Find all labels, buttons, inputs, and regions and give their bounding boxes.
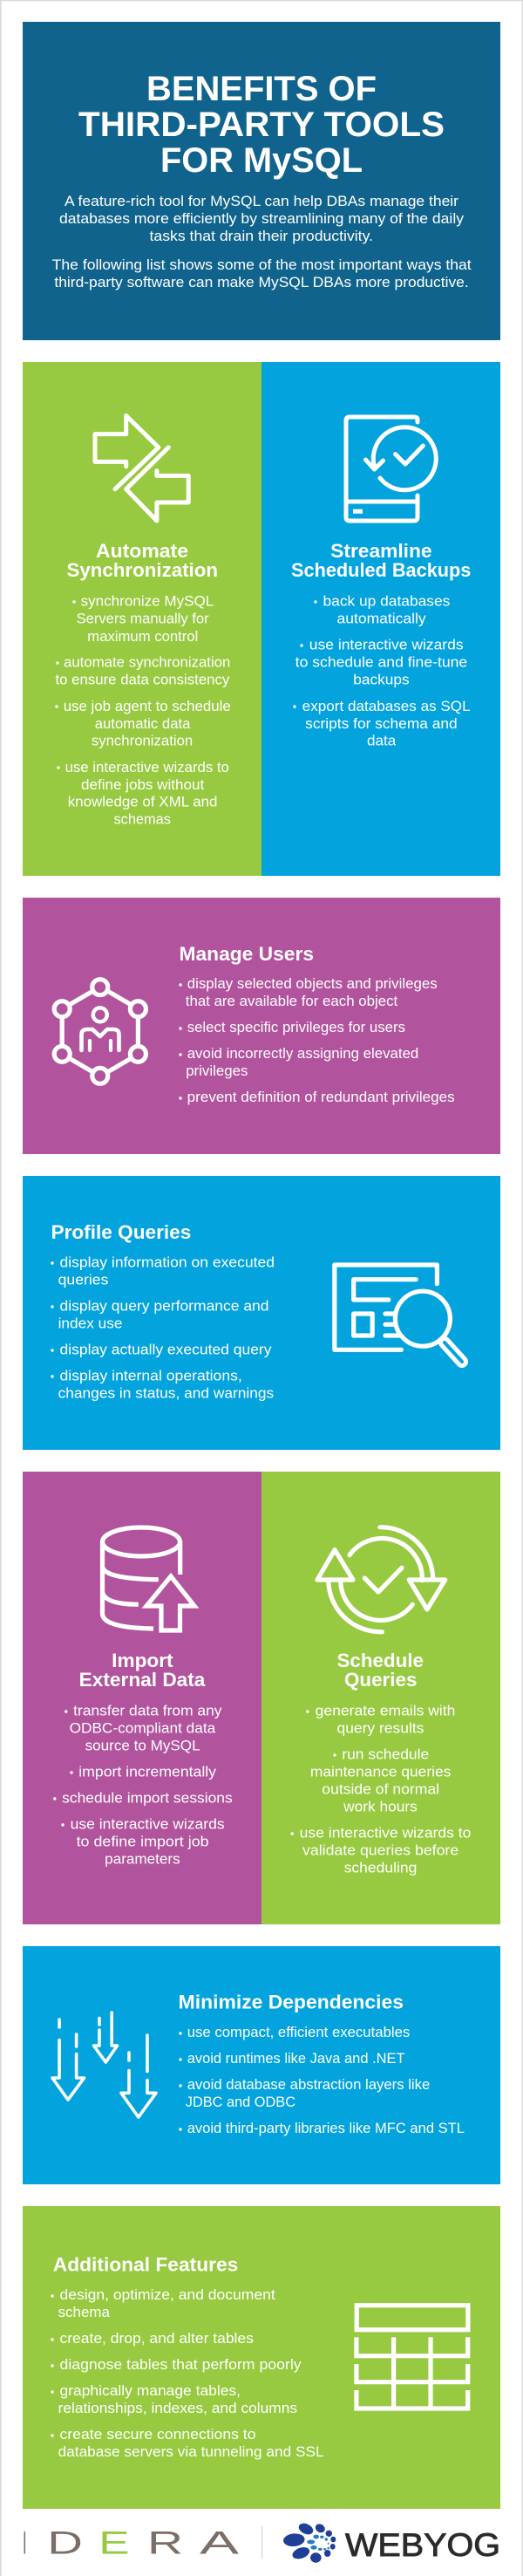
bullet list: use interactive wizards <box>71 1815 225 1832</box>
bullet list: create secure connections to <box>59 2426 256 2443</box>
icon: database with upload arrow <box>103 1527 194 1630</box>
heading: Automate <box>96 540 188 562</box>
bullet list <box>51 1254 275 1401</box>
panel: header intro <box>23 22 500 340</box>
intro text: tasks that drain their productivity. <box>150 228 373 244</box>
bullet list: maintenance queries <box>310 1763 451 1780</box>
icon: three down arrows <box>52 2012 156 2117</box>
title: BENEFITS OF <box>146 70 377 108</box>
intro text: The following list shows some of the most important ways that <box>52 256 472 273</box>
bullet list <box>291 1702 471 1876</box>
bullet list: maximum control <box>87 628 198 645</box>
heading: External Data <box>79 1669 206 1691</box>
bullet list: use job agent to schedule <box>64 698 231 714</box>
bullet list: database servers via tunneling and SSL <box>58 2443 324 2460</box>
bullet list: avoid third-party libraries like MFC and STL <box>187 2120 465 2136</box>
bullet list: use compact, efficient executables <box>187 2024 410 2040</box>
icon: user network hexagon <box>54 980 146 1083</box>
heading: Queries <box>344 1669 417 1691</box>
panel: automate synchronization <box>23 362 262 876</box>
bullet list: use interactive wizards to <box>300 1824 471 1841</box>
bullet list: to ensure data consistency <box>56 672 230 688</box>
panel: minimize dependencies <box>23 1946 500 2184</box>
heading: Additional Features <box>53 2253 238 2275</box>
bullet list: scripts for schema and <box>305 715 458 732</box>
title <box>78 70 445 180</box>
bullet list: run schedule <box>342 1746 429 1762</box>
bullet list: schedule import sessions <box>62 1789 233 1806</box>
bullet list: synchronize MySQL <box>81 593 214 610</box>
bullet list: relationships, indexes, and columns <box>58 2400 297 2416</box>
bullet list: that are available for each object <box>186 993 397 1009</box>
bullet list: privileges <box>186 1063 248 1079</box>
heading <box>66 540 218 581</box>
bullet list: schemas <box>113 811 171 828</box>
bullet list: to define import job <box>77 1833 209 1849</box>
heading: Manage Users <box>180 943 314 965</box>
icon: table grid <box>357 2306 468 2409</box>
bullet list: display internal operations, <box>59 1367 242 1384</box>
heading: Scheduled Backups <box>291 559 471 581</box>
heading <box>336 1650 424 1691</box>
heading <box>79 1650 206 1691</box>
bullet list: display selected objects and privileges <box>187 975 438 992</box>
bullet list: validate queries before <box>302 1841 458 1858</box>
logo: IDERA: I <box>23 2525 27 2561</box>
panel: profile queries <box>23 1176 500 1450</box>
footer logos <box>23 2521 500 2563</box>
icon: cycle arrows with check <box>317 1527 445 1632</box>
bullet list: avoid runtimes like Java and .NET <box>187 2050 405 2067</box>
bullet list: display information on executed <box>59 1254 275 1270</box>
bullet list: work hours <box>343 1798 418 1814</box>
bullet list <box>179 975 455 1105</box>
heading <box>291 540 471 581</box>
logo: IDERA: A <box>200 2525 240 2561</box>
bullet list: to schedule and fine-tune <box>295 654 467 671</box>
intro text: databases more efficiently by streamlining many of the daily <box>59 210 465 227</box>
bullet list: use interactive wizards to <box>65 759 229 776</box>
panel: streamline scheduled backups <box>262 362 500 876</box>
bullet list: prevent definition of redundant privileges <box>187 1089 455 1105</box>
bullet list: avoid incorrectly assigning elevated <box>187 1045 418 1062</box>
bullet list: synchronization <box>92 733 193 749</box>
bullet list <box>293 593 471 749</box>
bullet list: graphically manage tables, <box>59 2382 241 2399</box>
panel: import external data <box>23 1472 262 1924</box>
logo: IDERA: D <box>47 2525 83 2561</box>
bullet list: display actually executed query <box>59 1341 272 1357</box>
bullet list: use interactive wizards <box>309 636 464 653</box>
bullet list: create, drop, and alter tables <box>59 2330 254 2347</box>
bullet list <box>53 1702 233 1867</box>
panel: manage users <box>23 898 500 1154</box>
bullet list: import incrementally <box>78 1763 217 1780</box>
bullet list: query results <box>336 1719 424 1736</box>
bullet list: avoid database abstraction layers like <box>187 2076 430 2093</box>
logo: IDERA: R <box>147 2525 183 2561</box>
bullet list: scheduling <box>344 1859 417 1876</box>
icon: document with magnifier <box>335 1265 462 1362</box>
bullet list: automate synchronization <box>64 654 230 671</box>
bullet list: back up databases <box>323 593 450 610</box>
bullet list <box>51 2286 324 2460</box>
bullet list: display query performance and <box>59 1297 268 1314</box>
bullet list: source to MySQL <box>85 1737 200 1753</box>
bullet list: generate emails with <box>316 1702 455 1718</box>
heading: Minimize Dependencies <box>179 1992 404 2013</box>
bullet list: Servers manually for <box>77 611 209 627</box>
bullet list <box>179 2024 465 2136</box>
bullet list: export databases as SQL <box>302 698 471 714</box>
bullet list: knowledge of XML and <box>68 794 218 810</box>
bullet list: ODBC-compliant data <box>70 1719 216 1736</box>
bullet list: diagnose tables that perform poorly <box>59 2356 302 2373</box>
bullet list: JDBC and ODBC <box>186 2094 295 2110</box>
icon: opposing sync arrows <box>95 415 188 521</box>
heading: Profile Queries <box>51 1221 191 1243</box>
logo: IDERA <box>23 2525 240 2561</box>
heading: Schedule <box>336 1650 424 1671</box>
bullet list: select specific privileges for users <box>187 1019 405 1035</box>
bullet list: outside of normal <box>322 1780 439 1797</box>
bullet list: schema <box>58 2304 110 2320</box>
bullet list: backups <box>353 672 410 688</box>
title: FOR MySQL <box>160 141 363 180</box>
logo: Webyog mark <box>282 2521 336 2563</box>
intro text <box>52 193 472 290</box>
panel: schedule queries <box>262 1472 500 1924</box>
title: THIRD-PARTY TOOLS <box>78 106 445 144</box>
logo: IDERA: E <box>98 2525 129 2561</box>
bullet list <box>55 593 231 828</box>
heading: Synchronization <box>66 559 218 581</box>
bullet list: define jobs without <box>81 776 204 793</box>
bullet list: automatically <box>336 611 426 627</box>
bullet list: transfer data from any <box>73 1702 222 1718</box>
logo: Webyog wordmark: WEBYOG <box>345 2527 500 2563</box>
intro text: A feature-rich tool for MySQL can help DBAs manage their <box>65 193 458 209</box>
heading: Streamline <box>330 540 432 562</box>
intro text: third-party software can make MySQL DBAs more productive. <box>54 274 469 290</box>
bullet list: queries <box>58 1271 108 1288</box>
bullet list: data <box>367 733 397 749</box>
icon: backup drive with clock <box>346 417 436 521</box>
bullet list: changes in status, and warnings <box>58 1384 274 1401</box>
heading: Import <box>112 1650 173 1671</box>
bullet list: index use <box>58 1315 122 1331</box>
panel: additional features <box>23 2206 500 2509</box>
bullet list: design, optimize, and document <box>59 2286 275 2303</box>
bullet list: automatic data <box>95 715 191 732</box>
bullet list: parameters <box>105 1850 180 1867</box>
